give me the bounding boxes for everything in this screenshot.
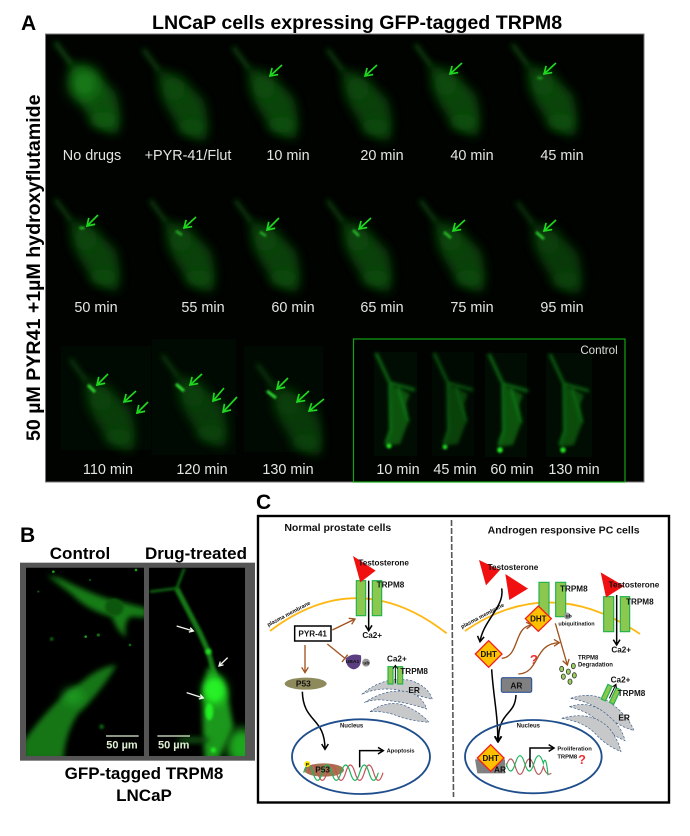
frame: 130 min — [244, 346, 324, 478]
arrow: PYR-41 to TRPM8 — [332, 619, 355, 630]
panel letter: A: A — [21, 12, 36, 35]
box: PYR-41 — [295, 626, 331, 641]
title: panel A: LNCaP cells expressing GFP-tagged TRPM8 — [152, 12, 562, 34]
promoter arrow: apoptosis — [360, 748, 415, 767]
frame: No drugs: No drugs — [63, 148, 121, 164]
frame: 50 min: 50 min — [74, 300, 118, 316]
DNA helix — [506, 756, 551, 775]
channel: TRPM8 being ubiquitinated — [539, 582, 595, 627]
frame: 40 min — [415, 44, 494, 164]
arrow: testosterone to DHT — [480, 588, 502, 642]
arrow: AR to TRPM8 — [518, 643, 559, 674]
arrow: DHT to membrane — [502, 625, 532, 658]
arrow: ubiquitination to degradation — [555, 623, 567, 665]
heading: androgen responsive PC cells: Androgen responsive PC cells — [488, 524, 640, 536]
unknown step: ? — [530, 652, 538, 667]
nucleus — [292, 719, 430, 794]
frame: +PYR-41/Flut — [143, 49, 231, 164]
control inset — [354, 339, 625, 482]
endoplasmic reticulum: ER — [618, 712, 630, 722]
channel: TRPM8 at ER: Ca2+ — [611, 676, 631, 685]
frame: 20 min — [327, 49, 404, 164]
image: drug-treated cell — [149, 568, 257, 765]
frame: 130 min: 130 min — [262, 462, 314, 478]
panel C: schematic frame — [258, 516, 669, 802]
control frame: 10 min: 10 min — [376, 462, 420, 478]
control label: Control — [580, 344, 618, 357]
UBA1 — [346, 654, 370, 669]
testosterone pair — [479, 560, 539, 600]
frame: 120 min: 120 min — [176, 462, 228, 478]
phosphorylated P53 on DNA — [304, 761, 383, 780]
TRPM8 degradation — [560, 656, 613, 684]
channel: TRPM8 with testosterone: TRPM8 — [626, 597, 654, 606]
P53 — [285, 678, 327, 690]
panel letter: C: C — [256, 491, 271, 514]
control frame: 60 min: 60 min — [490, 462, 534, 478]
panel letter: B: B — [20, 524, 35, 547]
panel B: fluorescence images — [20, 563, 257, 765]
endoplasmic reticulum — [362, 679, 432, 722]
DHT in cytoplasm — [475, 641, 502, 667]
frame: 45 min — [512, 44, 584, 164]
phosphorylated P53 on DNA: P — [306, 762, 310, 768]
heading: normal prostate cells: Normal prostate cells — [284, 522, 391, 534]
control frame: 10 min — [374, 352, 420, 478]
inhibition: PYR-41 to UBA1 — [327, 644, 348, 662]
channel: TRPM8 at ER: Ca2+ — [387, 655, 407, 664]
DHT in cytoplasm: DHT — [480, 650, 497, 659]
frame: 120 min — [152, 339, 237, 478]
DHT-AR complex — [475, 745, 506, 775]
frame: 55 min — [150, 200, 225, 316]
promoter arrow: proliferation: TRPM8 — [557, 755, 578, 761]
frame: 95 min: 95 min — [540, 300, 584, 316]
DHT-AR complex: DHT — [482, 754, 499, 763]
frame: 60 min — [235, 200, 315, 316]
promoter arrow: proliferation: ? — [578, 753, 586, 767]
nucleus — [465, 720, 602, 793]
AR — [501, 678, 532, 692]
control frame: 45 min — [432, 352, 477, 478]
frame: 40 min: 40 min — [450, 148, 494, 164]
frame: 55 min: 55 min — [181, 300, 225, 316]
frame: 75 min: 75 min — [450, 300, 494, 316]
vertical label: drug treatment: 50 µM PYR41 +1µM hydroxyflutamide — [23, 94, 45, 441]
channel: TRPM8 being ubiquitinated: ubiquitination — [558, 621, 595, 627]
control frame: 130 min — [546, 353, 600, 478]
frame: 20 min: 20 min — [360, 148, 404, 164]
TRPM8 degradation: Degradation — [578, 663, 613, 669]
control frame: 45 min: 45 min — [433, 462, 477, 478]
channel: TRPM8 with testosterone — [601, 572, 660, 655]
nucleus: Nucleus — [517, 724, 541, 730]
UBA1: UBA1 — [346, 659, 359, 665]
arrow: P53 to nucleus — [302, 692, 325, 749]
P53: P53 — [296, 679, 311, 689]
promoter arrow: proliferation — [530, 746, 592, 767]
panel B heading: Drug-treated: Drug-treated — [145, 544, 247, 563]
scale bar: 50 µm: 50 µm — [106, 739, 138, 751]
divider — [452, 520, 454, 797]
frame: 60 min: 60 min — [271, 300, 315, 316]
frame: 10 min: 10 min — [266, 148, 310, 164]
arrow: white, body — [187, 693, 203, 698]
frame: 110 min: 110 min — [83, 462, 133, 478]
frame: +PYR-41/Flut: +PYR-41/Flut — [145, 148, 231, 164]
arrows: into nucleus — [492, 669, 516, 742]
box: PYR-41: PYR-41 — [298, 630, 327, 639]
control frame: 130 min: 130 min — [548, 462, 600, 478]
channel: TRPM8 at ER: TRPM8 — [400, 667, 428, 676]
channel: TRPM8 at ER — [601, 676, 646, 704]
arrow: white, neurite — [177, 626, 193, 631]
image: control cells — [23, 568, 147, 760]
phosphorylated P53 on DNA: P53 — [315, 764, 330, 774]
frame: 10 min — [233, 47, 310, 164]
channel: TRPM8 being ubiquitinated: ub — [566, 614, 572, 620]
control frame: 60 min — [485, 353, 534, 478]
frame: No drugs — [55, 42, 121, 164]
DHT-AR complex: AR — [494, 765, 506, 775]
testosterone pair: Testosterone — [488, 563, 539, 572]
channel: TRPM8 at membrane: TRPM8 — [377, 581, 405, 590]
panel B heading: Control: Control — [50, 544, 110, 563]
caption: panel B: GFP-tagged TRPM8 — [65, 764, 223, 783]
promoter arrow: proliferation: Proliferation — [557, 746, 592, 752]
frame: 95 min — [517, 202, 584, 316]
frame: 65 min — [327, 200, 404, 316]
channel: TRPM8 at ER — [387, 655, 428, 684]
schematic: normal prostate cells — [266, 522, 447, 794]
testosterone: Testosterone — [358, 558, 409, 567]
arrow: PYR-41 to P53 — [303, 645, 307, 673]
endoplasmic reticulum — [562, 695, 634, 752]
DHT at membrane: DHT — [530, 615, 547, 624]
scale bar: 50 µm: 50 µm — [158, 739, 190, 751]
channel: TRPM8 at membrane: Ca2+ — [362, 631, 382, 640]
frame: 75 min — [420, 200, 494, 316]
AR: AR — [510, 680, 522, 690]
channel: TRPM8 with testosterone: Testosterone — [609, 581, 660, 590]
channel: TRPM8 with testosterone: Ca2+ — [611, 646, 631, 655]
channel: TRPM8 at membrane — [356, 581, 405, 640]
frame: 50 min — [55, 199, 119, 316]
plasma membrane: plasma membrane — [266, 601, 312, 628]
frame: 110 min — [61, 346, 151, 478]
channel: TRPM8 at ER: TRPM8 — [618, 689, 646, 698]
UBA1: ub — [363, 661, 369, 667]
TRPM8 degradation: TRPM8 — [578, 656, 599, 662]
DHT at membrane — [525, 606, 551, 631]
promoter arrow: apoptosis: Apoptosis — [387, 748, 415, 754]
nucleus: Nucleus — [340, 724, 364, 730]
plasma membrane: plasma membrane — [460, 603, 505, 630]
panel A: time-lapse micrographs — [46, 34, 644, 482]
channel: TRPM8 being ubiquitinated: TRPM8 — [560, 585, 588, 594]
schematic: androgen responsive PC cells — [460, 524, 660, 793]
caption: panel B: LNCaP — [116, 786, 172, 805]
frame: 45 min: 45 min — [540, 148, 584, 164]
plasma membrane — [266, 598, 447, 633]
plasma membrane — [460, 602, 640, 634]
endoplasmic reticulum: ER — [408, 685, 420, 695]
arrow: white, shoulder — [219, 658, 228, 666]
frame: 65 min: 65 min — [360, 300, 404, 316]
testosterone — [353, 556, 409, 582]
caption: panel B — [65, 764, 223, 805]
